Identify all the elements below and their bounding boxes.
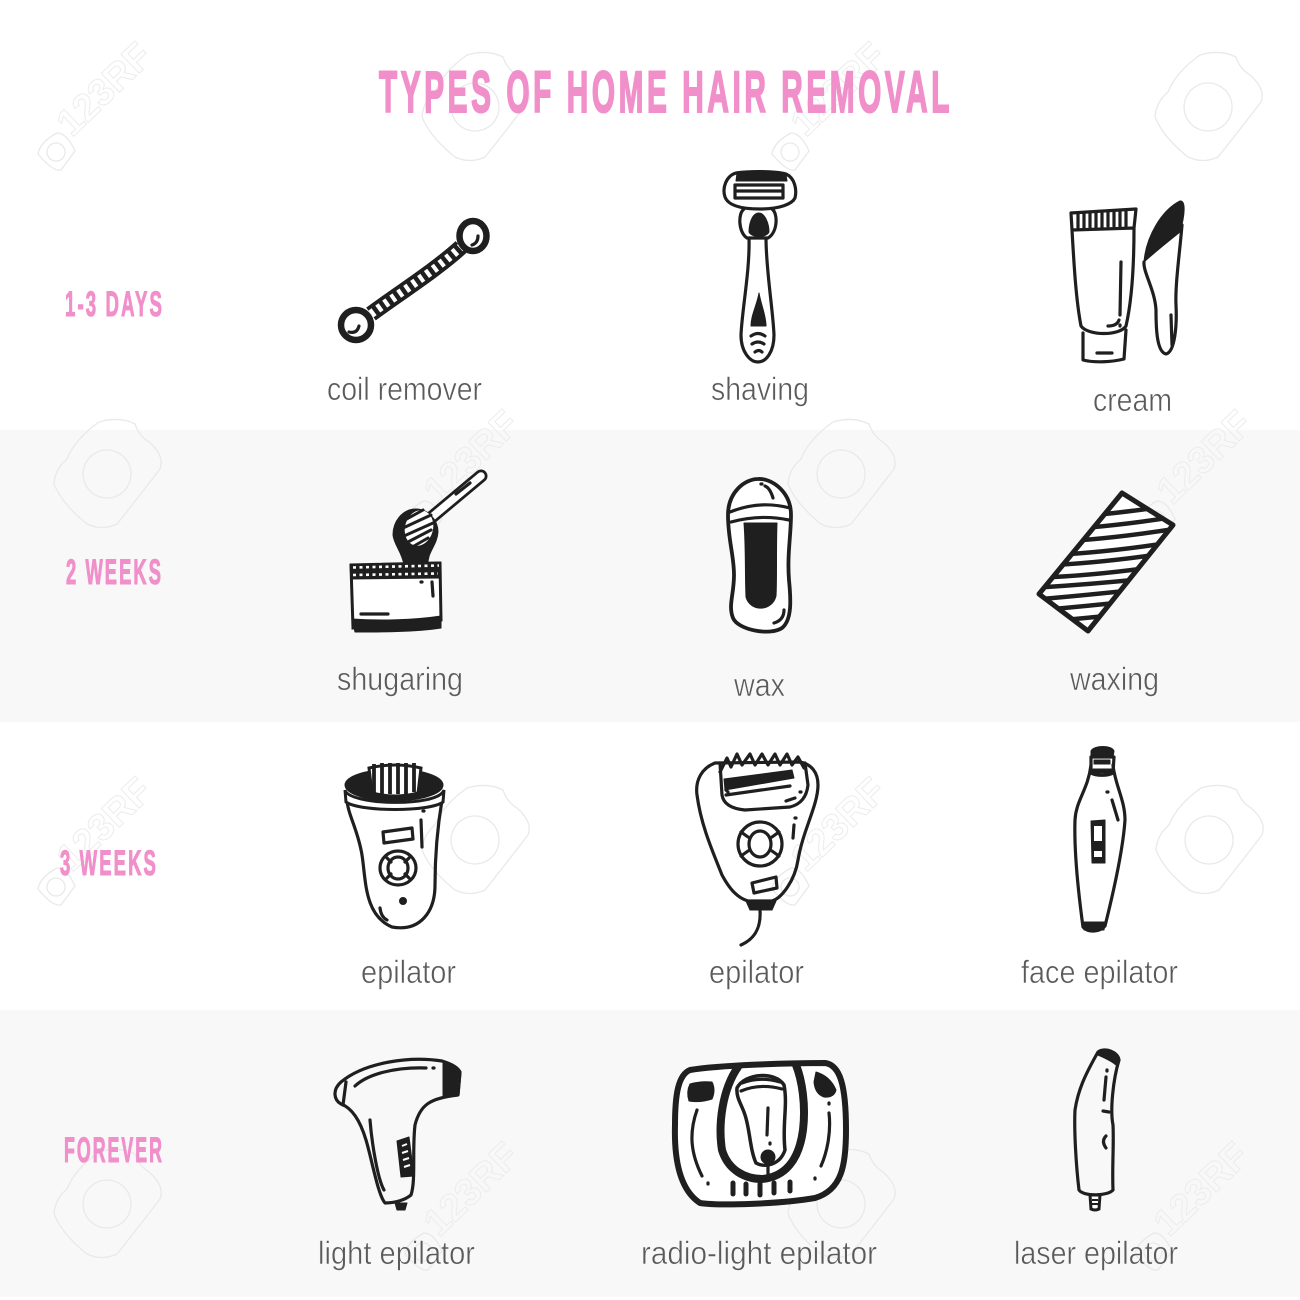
item: waxing — [1030, 493, 1180, 697]
item: coil remover — [327, 221, 486, 407]
item: wax — [728, 479, 791, 703]
icon: cream tube and spatula — [1071, 201, 1184, 362]
icon: radio-light epilator case — [675, 1063, 846, 1204]
label: epilator: epilator — [709, 954, 804, 990]
item: cream — [1071, 201, 1184, 418]
watermarks: 123RF — [783, 35, 894, 144]
watermarks: 123RF — [416, 403, 527, 512]
icon: IPL light epilator — [335, 1059, 461, 1210]
item: face epilator — [1021, 746, 1178, 990]
item: radio-light epilator — [641, 1063, 877, 1271]
item: laser epilator — [1014, 1050, 1178, 1271]
item: light epilator — [318, 1059, 475, 1271]
label: light epilator: light epilator — [318, 1235, 475, 1271]
label: cream: cream — [1093, 382, 1172, 418]
band: forever row background — [0, 1010, 1300, 1297]
item: epilator 1 — [345, 763, 456, 990]
watermarks: 123RF — [1146, 1135, 1257, 1244]
label: shaving: shaving — [711, 371, 809, 407]
time label: 3 weeks: 3 WEEKS — [60, 844, 158, 883]
item: epilator 2 — [697, 754, 818, 990]
label: epilator: epilator — [361, 954, 456, 990]
row: forever — [64, 1050, 1178, 1271]
watermarks: 123RF — [49, 770, 160, 879]
label: waxing: waxing — [1069, 661, 1159, 697]
label: radio-light epilator: radio-light epilator — [641, 1235, 877, 1271]
icon: razor — [724, 172, 796, 362]
icon: face epilator — [1075, 746, 1125, 931]
label: face epilator: face epilator — [1021, 954, 1178, 990]
icon: wax roll-on cartridge — [728, 479, 791, 632]
label: laser epilator: laser epilator — [1014, 1235, 1178, 1271]
time label: 2 weeks: 2 WEEKS — [66, 553, 163, 592]
watermarks: 123RF — [49, 35, 160, 144]
label: coil remover: coil remover — [327, 371, 482, 407]
item: shugaring — [337, 476, 481, 697]
label: wax: wax — [733, 667, 785, 703]
watermarks: 123RF — [1149, 403, 1260, 512]
row: 3 weeks — [60, 746, 1178, 990]
time label: 1-3 days: 1-3 DAYS — [65, 285, 164, 324]
item: shaving — [711, 172, 809, 407]
row: 1-3 days — [65, 172, 1184, 418]
watermarks: 123RF — [416, 1135, 527, 1244]
band: 2 weeks row background — [0, 430, 1300, 722]
icon: wax strip — [1030, 493, 1180, 631]
icon: laser epilator — [1075, 1050, 1119, 1210]
row: 2 weeks — [66, 476, 1180, 703]
time label: forever: FOREVER — [64, 1131, 164, 1170]
icon: coil remover — [341, 221, 486, 340]
watermarks: 123RF — [783, 770, 894, 879]
label: shugaring: shugaring — [337, 661, 463, 697]
icon: corded epilator — [697, 754, 818, 945]
icon: round-head epilator — [345, 763, 444, 928]
icon: sugar paste jar with dipper — [350, 476, 481, 632]
